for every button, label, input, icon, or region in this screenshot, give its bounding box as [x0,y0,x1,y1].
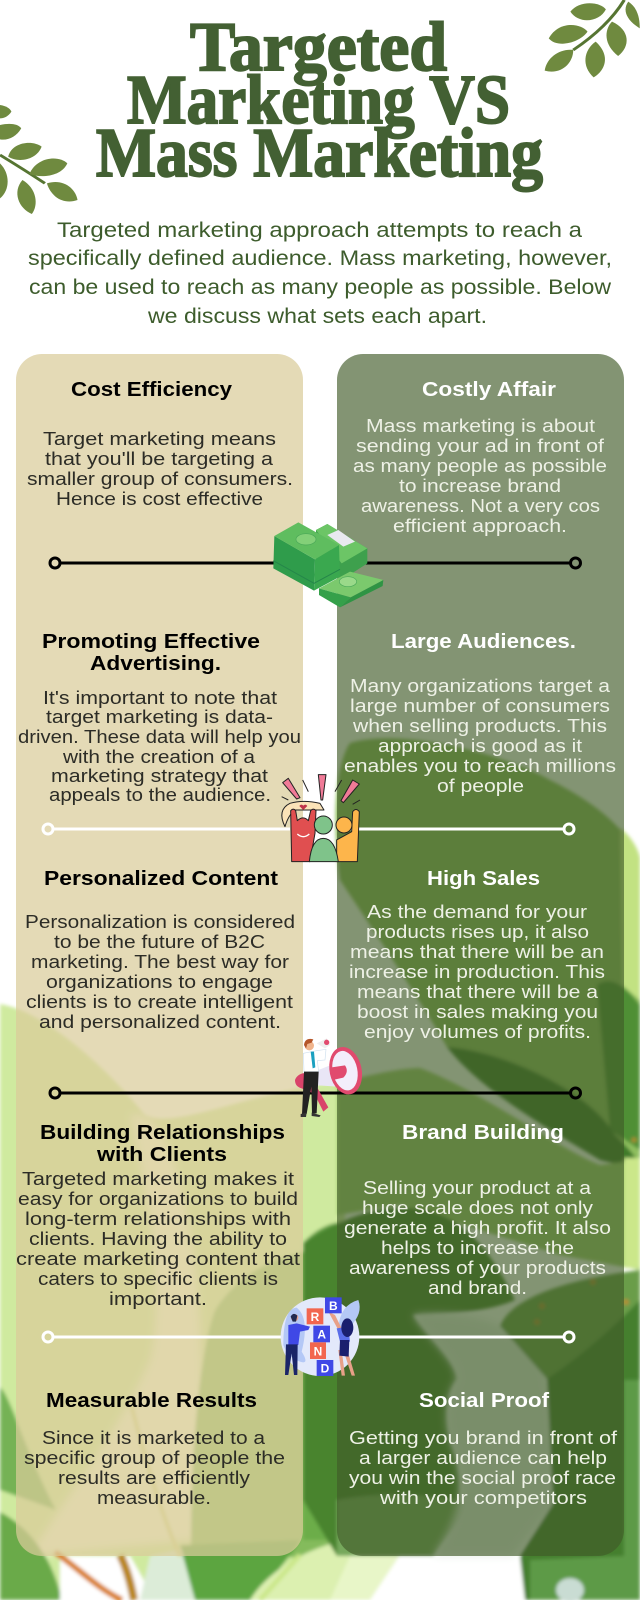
letter B: B [329,1299,338,1313]
divider 2: white timeline [43,824,574,834]
body text: Targeted marketing makes it [22,1169,294,1189]
body text: Since it is marketed to a [42,1428,266,1448]
body text: specific group of people the [24,1448,285,1468]
body text: large number of consumers [350,696,610,716]
heading [40,1122,285,1166]
body text: important. [109,1289,207,1309]
body text: caters to specific clients is [38,1269,278,1289]
icon: cheering crowd [282,775,360,862]
intro text: we discuss what sets each apart. [147,305,487,328]
body text [18,688,301,805]
letter N: N [314,1344,322,1358]
body text: when selling products. This [352,716,607,736]
icon: man with megaphone [295,1038,366,1117]
heading: Personalized Content [44,868,278,890]
body text: organizations to engage [46,972,273,992]
body text: marketing. The best way for [31,952,289,972]
left section: cost efficiency [27,379,293,509]
intro text: can be used to reach as many people as possible. Below [29,276,612,299]
heading: Promoting Effective [42,631,260,653]
body text: As the demand for your [367,902,587,922]
right section: social proof [349,1390,618,1508]
decorative sprig: left leaves [0,105,78,214]
left section: measurable results [24,1390,285,1508]
heading [42,631,260,675]
body text: Many organizations target a [350,676,611,696]
body text: with your competitors [379,1488,587,1508]
body text [24,1428,285,1508]
heading: Building Relationships [40,1122,285,1144]
body text: generate a high profit. It also [344,1218,611,1238]
body text: Personalization is considered [25,912,295,932]
body text: enables you to reach millions [344,756,616,776]
body text: as many people as possible [353,456,607,476]
right section: brand building [344,1122,611,1298]
body text: clients is to create intelligent [26,992,293,1012]
body text [344,1178,611,1298]
intro text: Targeted marketing approach attempts to reach a [57,219,582,242]
icon: people building brand [281,1297,360,1376]
body text [16,1169,300,1309]
body text: boost in sales making you [357,1002,598,1022]
body text: Hence is cost effective [56,489,263,509]
heading: Social Proof [419,1390,549,1412]
body text [344,676,616,796]
body text: with the creation of a [62,747,256,767]
body text: Getting you brand in front of [349,1428,618,1448]
icon: stacks of money [273,522,383,607]
left section: personalized content [25,868,295,1032]
body text [349,902,605,1042]
panel: left column background [16,354,303,1556]
letter R: R [311,1310,320,1324]
right section: high sales [349,868,605,1042]
heading: Brand Building [402,1122,564,1144]
body text: appeals to the audience. [49,785,271,805]
body text: driven. These data will help you [18,727,301,747]
body text: to be the future of B2C [54,932,265,952]
title: Targeted [190,9,447,86]
body text: Mass marketing is about [366,416,595,436]
body text: marketing strategy that [51,766,268,786]
heading: Costly Affair [422,379,556,401]
heading: Large Audiences. [391,631,576,653]
mid leaf [337,1068,640,1270]
intro text [28,219,612,328]
left section: building relationships [16,1122,300,1309]
body text: smaller group of consumers. [27,469,293,489]
body text: easy for organizations to build [18,1189,298,1209]
body text [353,416,607,536]
title [96,9,543,192]
body text: sending your ad in front of [356,436,605,456]
body text: approach is good as it [378,736,582,756]
body text: increase in production. This [349,962,605,982]
intro text: specifically defined audience. Mass marketing, however, [28,247,612,270]
body text [349,1428,618,1508]
body text: long-term relationships with [25,1209,291,1229]
body text: huge scale does not only [362,1198,593,1218]
heading: Cost Efficiency [71,379,233,401]
body text: and personalized content. [39,1012,281,1032]
stems [55,1552,122,1600]
heading: Measurable Results [46,1390,257,1412]
body text: to increase brand [399,476,561,496]
left section: promoting effective advertising [18,631,301,805]
body text: target marketing is data- [46,707,273,727]
body text: a larger audience can help [359,1448,607,1468]
body text: measurable. [97,1488,211,1508]
body text: awareness of your products [349,1258,606,1278]
body text: Target marketing means [43,429,276,449]
divider 4: white timeline [43,1332,574,1342]
right section: costly affair [353,379,607,536]
body text: clients. Having the ability to [29,1229,287,1249]
body text: that you'll be targeting a [45,449,274,469]
heading: High Sales [427,868,540,890]
big upper leaf [335,738,640,1180]
body text [27,429,293,509]
body text: awareness. Not a very cos [361,496,600,516]
body text: It's important to note that [43,688,277,708]
title: Marketing VS [127,62,510,139]
body text: results are efficiently [58,1468,250,1488]
body text: Selling your product at a [363,1178,592,1198]
divider 1: black timeline [50,558,580,568]
body text: create marketing content that [16,1249,300,1269]
body text: enjoy volumes of profits. [364,1022,591,1042]
body text: means that there will be an [350,942,604,962]
body text [25,912,295,1032]
body text: efficient approach. [393,516,567,536]
body text: of people [437,776,524,796]
divider 3: black timeline [50,1088,580,1098]
body text: helps to increase the [381,1238,574,1258]
letter D: D [321,1362,330,1376]
right section: large audiences [344,631,616,796]
body text: means that there will be a [357,982,599,1002]
heading: Advertising. [90,653,221,675]
decorative sprig: top right leaves [545,0,640,77]
body text: products rises up, it also [366,922,589,942]
body text: you win the social proof race [349,1468,616,1488]
body text: and brand. [428,1278,527,1298]
heading: with Clients [96,1144,227,1166]
title: Mass Marketing [96,115,543,192]
panel: right column background [337,354,624,1556]
letter A: A [317,1328,326,1342]
